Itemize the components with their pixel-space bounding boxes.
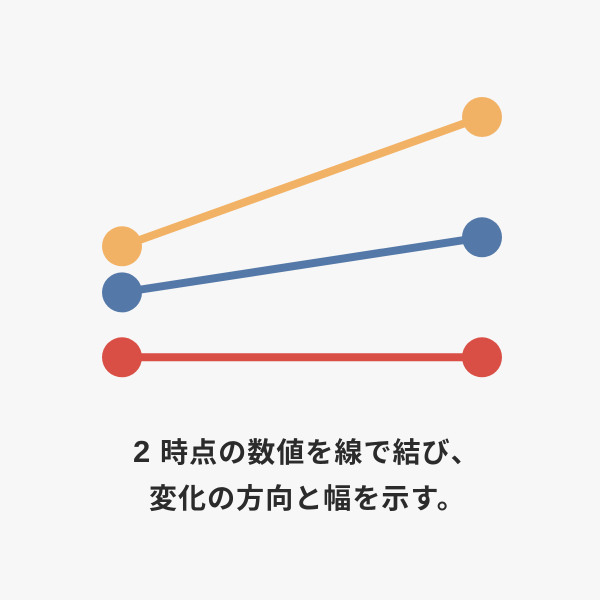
series: red flat line: [102, 337, 502, 377]
caption: 2 時点の数値を線で結び、: [133, 434, 480, 469]
series: orange slope: [102, 97, 502, 266]
caption: 変化の方向と幅を示す。: [149, 483, 466, 514]
series: blue slope: [102, 217, 502, 312]
caption: [133, 434, 480, 514]
